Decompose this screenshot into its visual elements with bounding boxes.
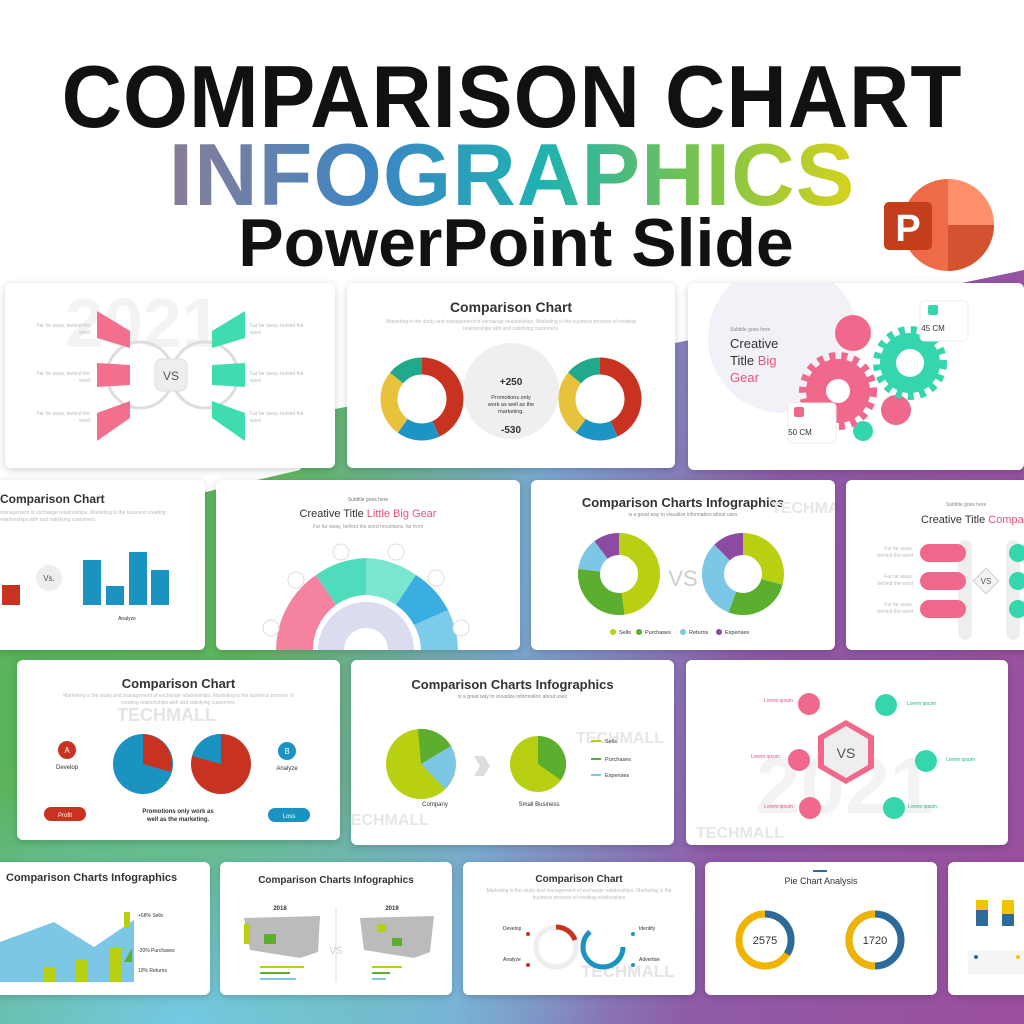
icon: PowerPoint logo: P <box>895 208 921 250</box>
panel: slide 4 bar chart <box>0 480 205 650</box>
title: COMPARISON CHART <box>62 47 962 146</box>
panel: slide 7 creative title compare: Subtitle goes here <box>946 502 986 508</box>
panel: slide 10 hexagon VS: Lorem ipsum <box>908 804 937 810</box>
panel: slide 2 comparison chart donuts: -530 <box>501 425 521 436</box>
panel: slide 5 little big gear <box>216 480 520 650</box>
panel: slide 14 pie chart analysis <box>705 862 937 995</box>
panel: slide 1 VS 2021: 2021 <box>65 284 221 362</box>
panel: slide 1 VS 2021: Far far away, behind the word <box>36 411 90 424</box>
subtitle gradient: INFOGRAPHICS <box>169 125 855 224</box>
panel: slide 9 company vs small business pies: is a great way to visualize information about uses <box>458 694 567 700</box>
panel: slide 8 pie A vs B: Comparison Chart <box>122 676 235 691</box>
panel: slide 11 area chart: Comparison Charts Infographics <box>6 872 177 884</box>
panel: slide 10 hexagon VS <box>686 660 1008 845</box>
panel: slide 10 hexagon VS: Lorem ipsum <box>764 698 793 704</box>
panel: slide 7 creative title compare <box>846 480 1024 650</box>
panel: slide 12 US maps: VS <box>329 946 343 957</box>
panel: slide 1 VS 2021: Far far away, behind the word <box>250 323 304 336</box>
panel: slide 1 VS 2021: Far far away, behind the word <box>250 371 304 384</box>
panel: slide 13 progress circles: Develop <box>503 926 522 932</box>
panel: slide 2 comparison chart donuts <box>347 283 675 468</box>
panel: slide 3 creative title big gear: 45 CM <box>921 324 945 333</box>
panel: slide 12 US maps: 2019 <box>385 906 399 912</box>
panel: slide 9 company vs small business pies: Purchases <box>605 757 631 763</box>
panel: slide 8 pie A vs B: Loss <box>283 814 295 820</box>
panel: slide 10 hexagon VS: TECHMALL <box>696 825 784 842</box>
panel: slide 5 little big gear: Subtitle goes here <box>348 497 388 503</box>
panel: slide 9 company vs small business pies: Comparison Charts Infographics <box>411 677 614 692</box>
panel: slide 7 creative title compare: Far far away, behind the word <box>877 574 913 587</box>
panel: slide 7 creative title compare: VS <box>981 577 991 586</box>
panel: slide 11 area chart: -20% Purchases <box>138 948 175 954</box>
panel: slide 11 area chart <box>0 862 210 995</box>
panel: slide 13 progress circles: Analyze <box>503 957 521 963</box>
panel: slide 8 pie A vs B: Profit <box>58 813 72 819</box>
panel: slide 10 hexagon VS: VS <box>837 745 855 761</box>
panel: slide 8 pie A vs B: Develop <box>56 765 79 771</box>
icon: PowerPoint logo <box>884 179 994 271</box>
panel: slide 2 comparison chart donuts: Marketing is the study and management of exchange relationships. Marketing is the business process of creating relationships with and satisfying customers. <box>386 319 636 332</box>
panel: slide 2 comparison chart donuts: work as well as the <box>487 402 534 408</box>
panel: slide 9 company vs small business pies: TECHMALL <box>576 730 664 747</box>
panel: slide 4 bar chart: Vs. <box>43 574 55 583</box>
panel: slide 15 partial bar <box>948 862 1024 995</box>
panel: slide 3 creative title big gear: Gear <box>730 370 759 385</box>
panel: slide 13 progress circles: Comparison Chart <box>535 874 623 885</box>
panel: slide 6 donut comparison: VS <box>668 566 698 591</box>
panel: slide 14 pie chart analysis: 1720 <box>863 935 887 947</box>
panel: slide 1 VS 2021: Far far away, behind the word <box>36 371 90 384</box>
panel: slide 14 pie chart analysis: Pie Chart Analysis <box>784 876 858 886</box>
panel: slide 8 pie A vs B: Marketing is the study and management of exchange relationships. Marketing is the business process of creating relationships with and satisfying customers. <box>63 693 294 706</box>
panel: slide 8 pie A vs B: Promotions only work as <box>142 809 214 815</box>
panel: slide 8 pie A vs B: A <box>64 746 70 755</box>
panel: slide 6 donut comparison: is a great way to visualize information about uses <box>629 512 737 518</box>
panel: slide 3 creative title big gear <box>688 283 1024 470</box>
panel: slide 8 pie A vs B: TECHMALL <box>117 705 216 725</box>
panel: slide 2 comparison chart donuts: Comparison Chart <box>450 299 572 315</box>
panel: slide 13 progress circles: Identify <box>639 926 656 932</box>
panel: slide 3 creative title big gear: Subtitle goes here <box>730 327 770 333</box>
panel: slide 10 hexagon VS: Lorem ipsum <box>751 754 780 760</box>
panel: slide 13 progress circles: Marketing is the study and management of exchange relationships. Marketing is the business process of creating relationships <box>486 888 672 901</box>
panel: slide 6 donut comparison: Sells <box>619 630 631 636</box>
panel: slide 5 little big gear: Far far away, behind the word mountains, far from <box>313 524 423 530</box>
panel: slide 9 company vs small business pies: Sells <box>605 739 617 745</box>
panel: slide 14 pie chart analysis: 2575 <box>753 935 777 947</box>
panel: slide 13 progress circles <box>463 862 695 995</box>
panel: slide 13 progress circles: Advertise <box>639 957 660 963</box>
panel: slide 10 hexagon VS: 2021 <box>756 741 934 830</box>
panel: slide 13 progress circles: TECHMALL <box>581 962 674 981</box>
panel: slide 4 bar chart: management of exchange relationships. Marketing is the business creating relationships with and satisfying customers. <box>0 510 166 523</box>
panel: slide 1 VS 2021: Far far away, behind the word <box>250 411 304 424</box>
panel: slide 2 comparison chart donuts: marketing. <box>498 409 524 415</box>
panel: slide 8 pie A vs B: Analyze <box>276 766 298 772</box>
panel: slide 4 bar chart: Comparison Chart <box>0 492 105 506</box>
subtitle: PowerPoint Slide: PowerPoint Slide <box>238 205 794 281</box>
panel: slide 8 pie A vs B: B <box>284 747 290 756</box>
panel: slide 9 company vs small business pies <box>351 660 674 845</box>
panel: slide 3 creative title big gear: Title Big <box>730 353 776 368</box>
panel: slide 8 pie A vs B: well as the marketing. <box>146 817 210 823</box>
panel: slide 7 creative title compare: Creative Title Compa <box>921 514 1024 526</box>
panel: slide 9 company vs small business pies: Small Business <box>518 802 560 808</box>
panel: slide 6 donut comparison: Purchases <box>645 630 671 636</box>
panel: slide 12 US maps: 2018 <box>273 906 287 912</box>
panel: slide 10 hexagon VS: Lorem ipsum <box>764 804 793 810</box>
panel: slide 1 VS 2021 <box>5 283 335 468</box>
panel: slide 2 comparison chart donuts: Promotions only <box>491 395 531 401</box>
panel: slide 1 VS 2021: VS <box>163 369 179 383</box>
panel: slide 5 little big gear: Creative Title Little Big Gear <box>300 508 436 520</box>
panel: slide 4 bar chart: Analyze <box>118 616 136 622</box>
panel: slide 10 hexagon VS: Lorem ipsum <box>907 701 936 707</box>
panel: slide 6 donut comparison: Comparison Charts Infographics <box>582 495 784 510</box>
panel: slide 11 area chart: +68% Sells <box>138 913 164 919</box>
panel: slide 3 creative title big gear: Creative <box>730 336 778 351</box>
panel: slide 6 donut comparison: Returns <box>689 630 709 636</box>
panel: slide 3 creative title big gear: 50 CM <box>788 428 812 437</box>
panel: slide 12 US maps <box>220 862 452 995</box>
panel: slide 10 hexagon VS: Lorem ipsum <box>946 757 975 763</box>
panel: slide 7 creative title compare: Far far away, behind the word <box>877 602 913 615</box>
panel: slide 7 creative title compare: Far far away, behind the word <box>877 546 913 559</box>
panel: slide 6 donut comparison <box>531 480 835 650</box>
panel: slide 9 company vs small business pies: Expenses <box>605 773 629 779</box>
panel: slide 8 pie A vs B <box>17 660 340 840</box>
panel: slide 2 comparison chart donuts: +250 <box>500 377 523 388</box>
panel: slide 6 donut comparison: Expenses <box>725 630 749 636</box>
panel: slide 12 US maps: Comparison Charts Infographics <box>258 875 414 886</box>
panel: slide 11 area chart: 10% Returns <box>138 968 167 974</box>
panel: slide 9 company vs small business pies: Company <box>422 802 448 808</box>
panel: slide 1 VS 2021: Far far away, behind the word <box>36 323 90 336</box>
